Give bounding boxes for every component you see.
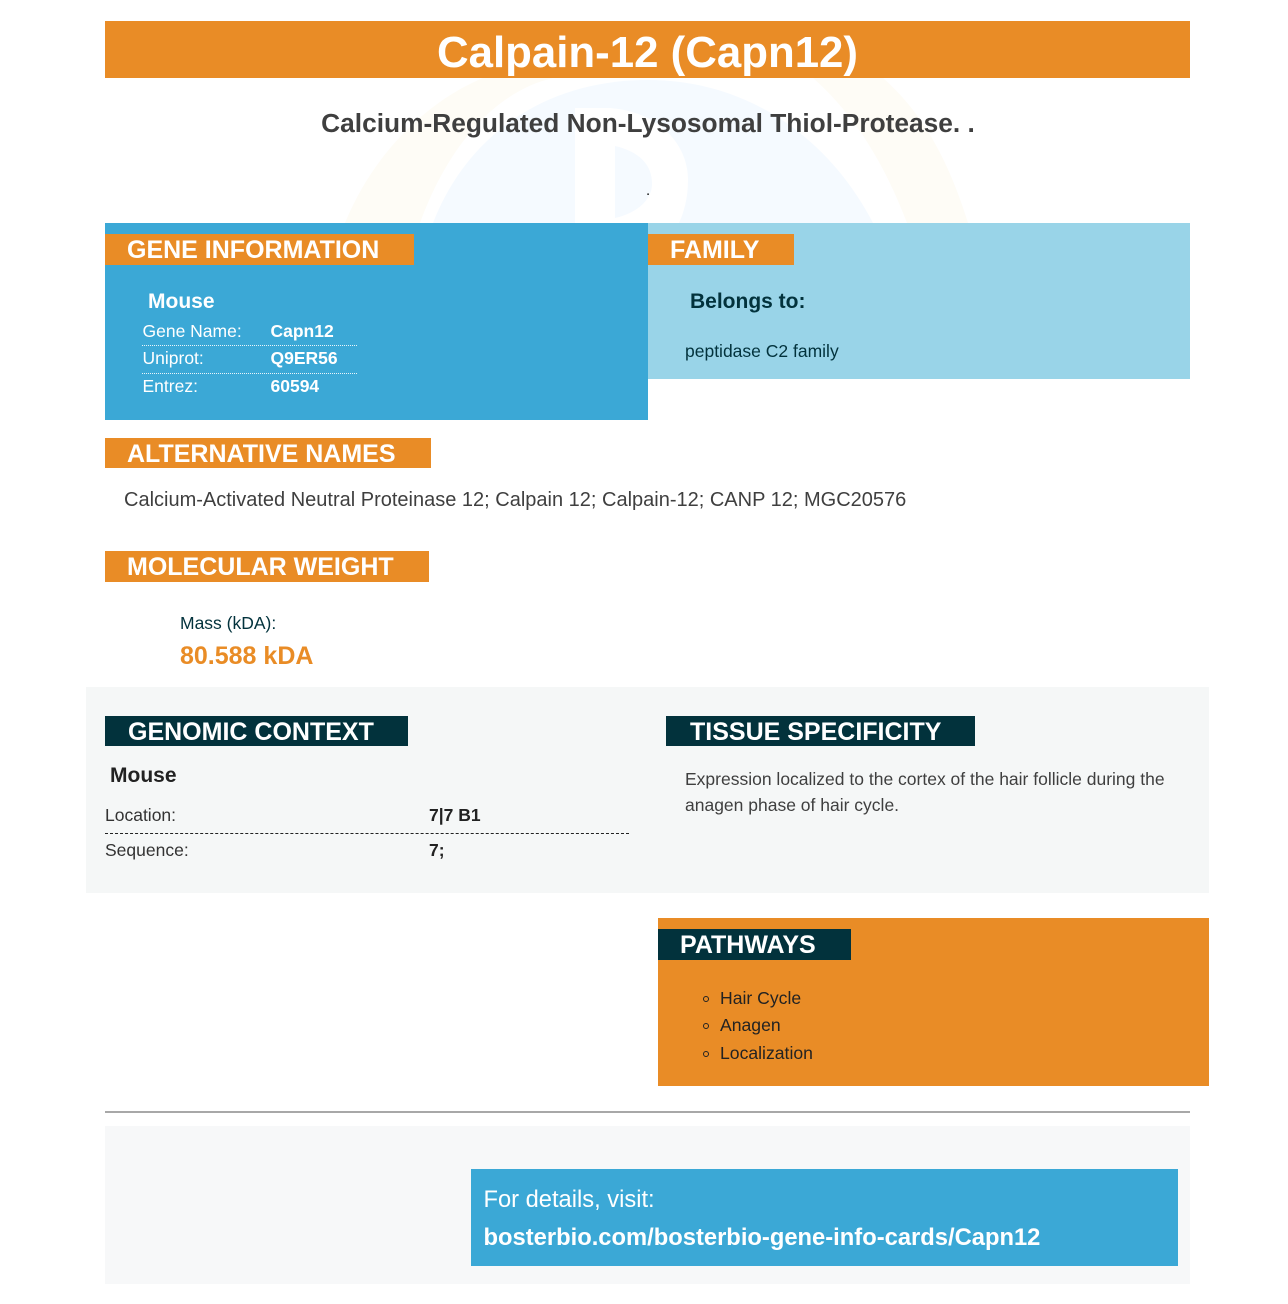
panel: family bbox=[648, 223, 1190, 379]
sequence row: Sequence: bbox=[105, 840, 189, 860]
panel: pathways bbox=[658, 918, 1209, 1086]
heading: alternative names: ALTERNATIVE NAMES bbox=[127, 440, 396, 468]
species label: Mouse bbox=[148, 290, 215, 313]
pathway list bbox=[703, 988, 813, 1063]
tissue specificity text: Expression localized to the cortex of the hair follicle during the anagen phase of hair cycle. bbox=[685, 769, 1165, 815]
mass value: 80.588 kDA bbox=[180, 642, 313, 670]
subtitle: Calcium-Regulated Non-Lysosomal Thiol-Protease. . bbox=[321, 108, 975, 138]
heading: tissue specificity: TISSUE SPECIFICITY bbox=[690, 718, 941, 746]
heading: pathways: PATHWAYS bbox=[680, 931, 816, 959]
callout label: For details, visit: bbox=[484, 1187, 655, 1213]
heading: family: FAMILY bbox=[670, 236, 759, 264]
pathway: localization: Localization bbox=[720, 1043, 813, 1063]
watermark logo bbox=[346, 78, 968, 223]
uniprot row bbox=[142, 348, 357, 374]
alternative names text: Calcium-Activated Neutral Proteinase 12; Calpain 12; Calpain-12; CANP 12; MGC20576 bbox=[124, 489, 906, 511]
panel: gene information bbox=[105, 223, 648, 420]
pathway: hair cycle: Hair Cycle bbox=[720, 988, 801, 1008]
title banner bbox=[105, 21, 1190, 78]
panel: genomic context and tissue specificity bbox=[86, 687, 1209, 893]
gene name row bbox=[142, 321, 357, 346]
bullet bbox=[703, 996, 709, 1002]
bullet bbox=[703, 1051, 709, 1057]
sequence row bbox=[105, 840, 445, 860]
small dot text: . bbox=[646, 182, 650, 199]
bullet bbox=[703, 1023, 709, 1029]
mass label: Mass (kDA): bbox=[180, 613, 276, 633]
heading: pathways bbox=[658, 929, 851, 960]
species label: Mouse bbox=[110, 764, 177, 787]
location row bbox=[105, 803, 629, 834]
location row: Location: bbox=[105, 805, 176, 825]
title banner: Calpain-12 (Capn12) bbox=[437, 28, 858, 77]
uniprot row: Uniprot: bbox=[142, 348, 204, 368]
heading: gene information: GENE INFORMATION bbox=[127, 236, 379, 264]
callout url: bosterbio.com/bosterbio-gene-info-cards/Capn12 bbox=[484, 1224, 1040, 1251]
gene name row: Gene Name: bbox=[142, 321, 242, 341]
callout: details link bbox=[471, 1169, 1178, 1266]
heading: molecular weight: MOLECULAR WEIGHT bbox=[127, 553, 394, 581]
pathway: anagen: Anagen bbox=[720, 1015, 781, 1035]
heading: genomic context: GENOMIC CONTEXT bbox=[128, 718, 374, 746]
footer panel bbox=[105, 1126, 1190, 1284]
heading: family bbox=[648, 234, 794, 265]
entrez row: Entrez: bbox=[142, 376, 198, 396]
gene name row: Capn12 bbox=[270, 321, 334, 341]
entrez row bbox=[142, 376, 320, 396]
entrez row: 60594 bbox=[270, 376, 319, 396]
uniprot row: Q9ER56 bbox=[270, 348, 338, 368]
family value: peptidase C2 family bbox=[685, 341, 839, 361]
location row: 7|7 B1 bbox=[429, 805, 481, 825]
belongs to label: Belongs to: bbox=[690, 290, 806, 313]
sequence row: 7; bbox=[429, 840, 445, 860]
